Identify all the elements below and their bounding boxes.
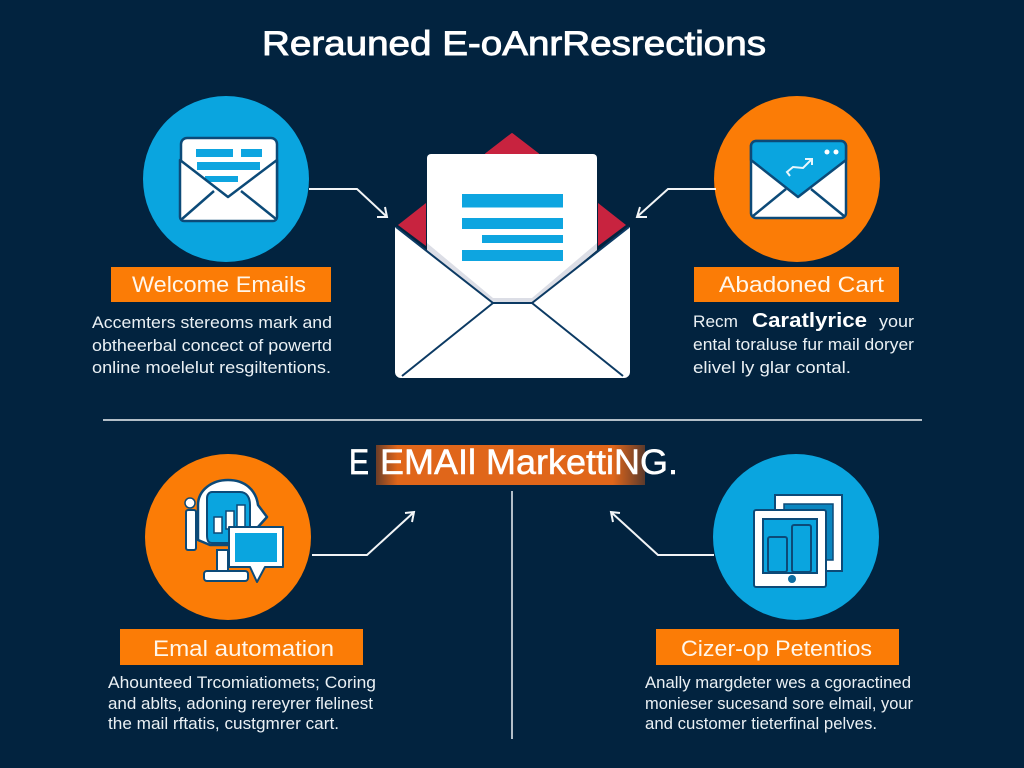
panel: abandoned cart <box>637 96 914 377</box>
title: Rerauned E-oAnrResrections <box>262 25 766 63</box>
arrow: retention to centre <box>611 512 714 555</box>
panel: welcome emails <box>92 96 387 377</box>
text block: abandoned cart: ental toraluse fur mail doryer <box>693 335 914 354</box>
text block: customer retention: and customer tieterfinal pelves. <box>645 714 877 733</box>
heading: welcome emails <box>111 267 331 302</box>
heading: abandoned cart: Abadoned Cart <box>719 272 884 297</box>
vertical line <box>511 491 513 739</box>
text block: welcome emails: obtheerbal concect of powertd <box>92 336 332 355</box>
text block: email automation: Ahounteed Trcomiatiomets; Coring <box>108 673 376 692</box>
text block: abandoned cart <box>693 310 914 377</box>
icon: orange circle with chart head and speech bubble <box>145 454 311 620</box>
text block: abandoned cart: your <box>879 312 914 331</box>
heading: welcome emails: Welcome Emails <box>132 272 306 297</box>
text block: customer retention: monieser sucesand sore elmail, your <box>645 694 913 713</box>
text block: welcome emails <box>92 313 332 377</box>
icon: central open envelope <box>395 134 630 378</box>
heading: email automation: Emal automation <box>153 636 334 661</box>
arrow: welcome to centre <box>309 189 387 217</box>
panel: email automation <box>108 454 414 733</box>
heading: customer retention: Cizer-op Petentios <box>681 636 872 661</box>
icon: orange circle with chart envelope <box>714 96 880 262</box>
text block: customer retention <box>645 673 913 733</box>
divider line <box>103 419 922 421</box>
heading: email marketing: EMAIl MarkettiNG. <box>380 443 678 482</box>
text block: abandoned cart: elivel ly glar contal. <box>693 358 851 377</box>
heading: customer retention <box>656 629 899 665</box>
text block: customer retention: Anally margdeter wes a cgoractined <box>645 673 911 692</box>
heading: abandoned cart <box>694 267 899 302</box>
icon: blue circle with tablets and bars <box>713 454 879 620</box>
icon: blue circle with letter envelope <box>143 96 309 262</box>
text block: welcome emails: Accemters stereoms mark and <box>92 313 332 332</box>
text block: welcome emails: online moelelut resgiltentions. <box>92 358 331 377</box>
panel: customer retention <box>611 454 913 733</box>
text block: abandoned cart: Recm <box>693 312 738 331</box>
heading: email automation <box>120 629 363 665</box>
text block: email automation: the mail rftatis, custgmrer cart. <box>108 714 339 733</box>
text block: email automation <box>108 673 376 733</box>
heading: email marketing: E <box>349 443 369 482</box>
arrow: automation to centre <box>312 512 414 555</box>
text block: email automation: and ablts, adoning rereyrer flelinest <box>108 694 373 713</box>
text block: abandoned cart: Caratlyrice <box>752 310 867 332</box>
arrow: abandoned cart to centre <box>637 189 716 217</box>
